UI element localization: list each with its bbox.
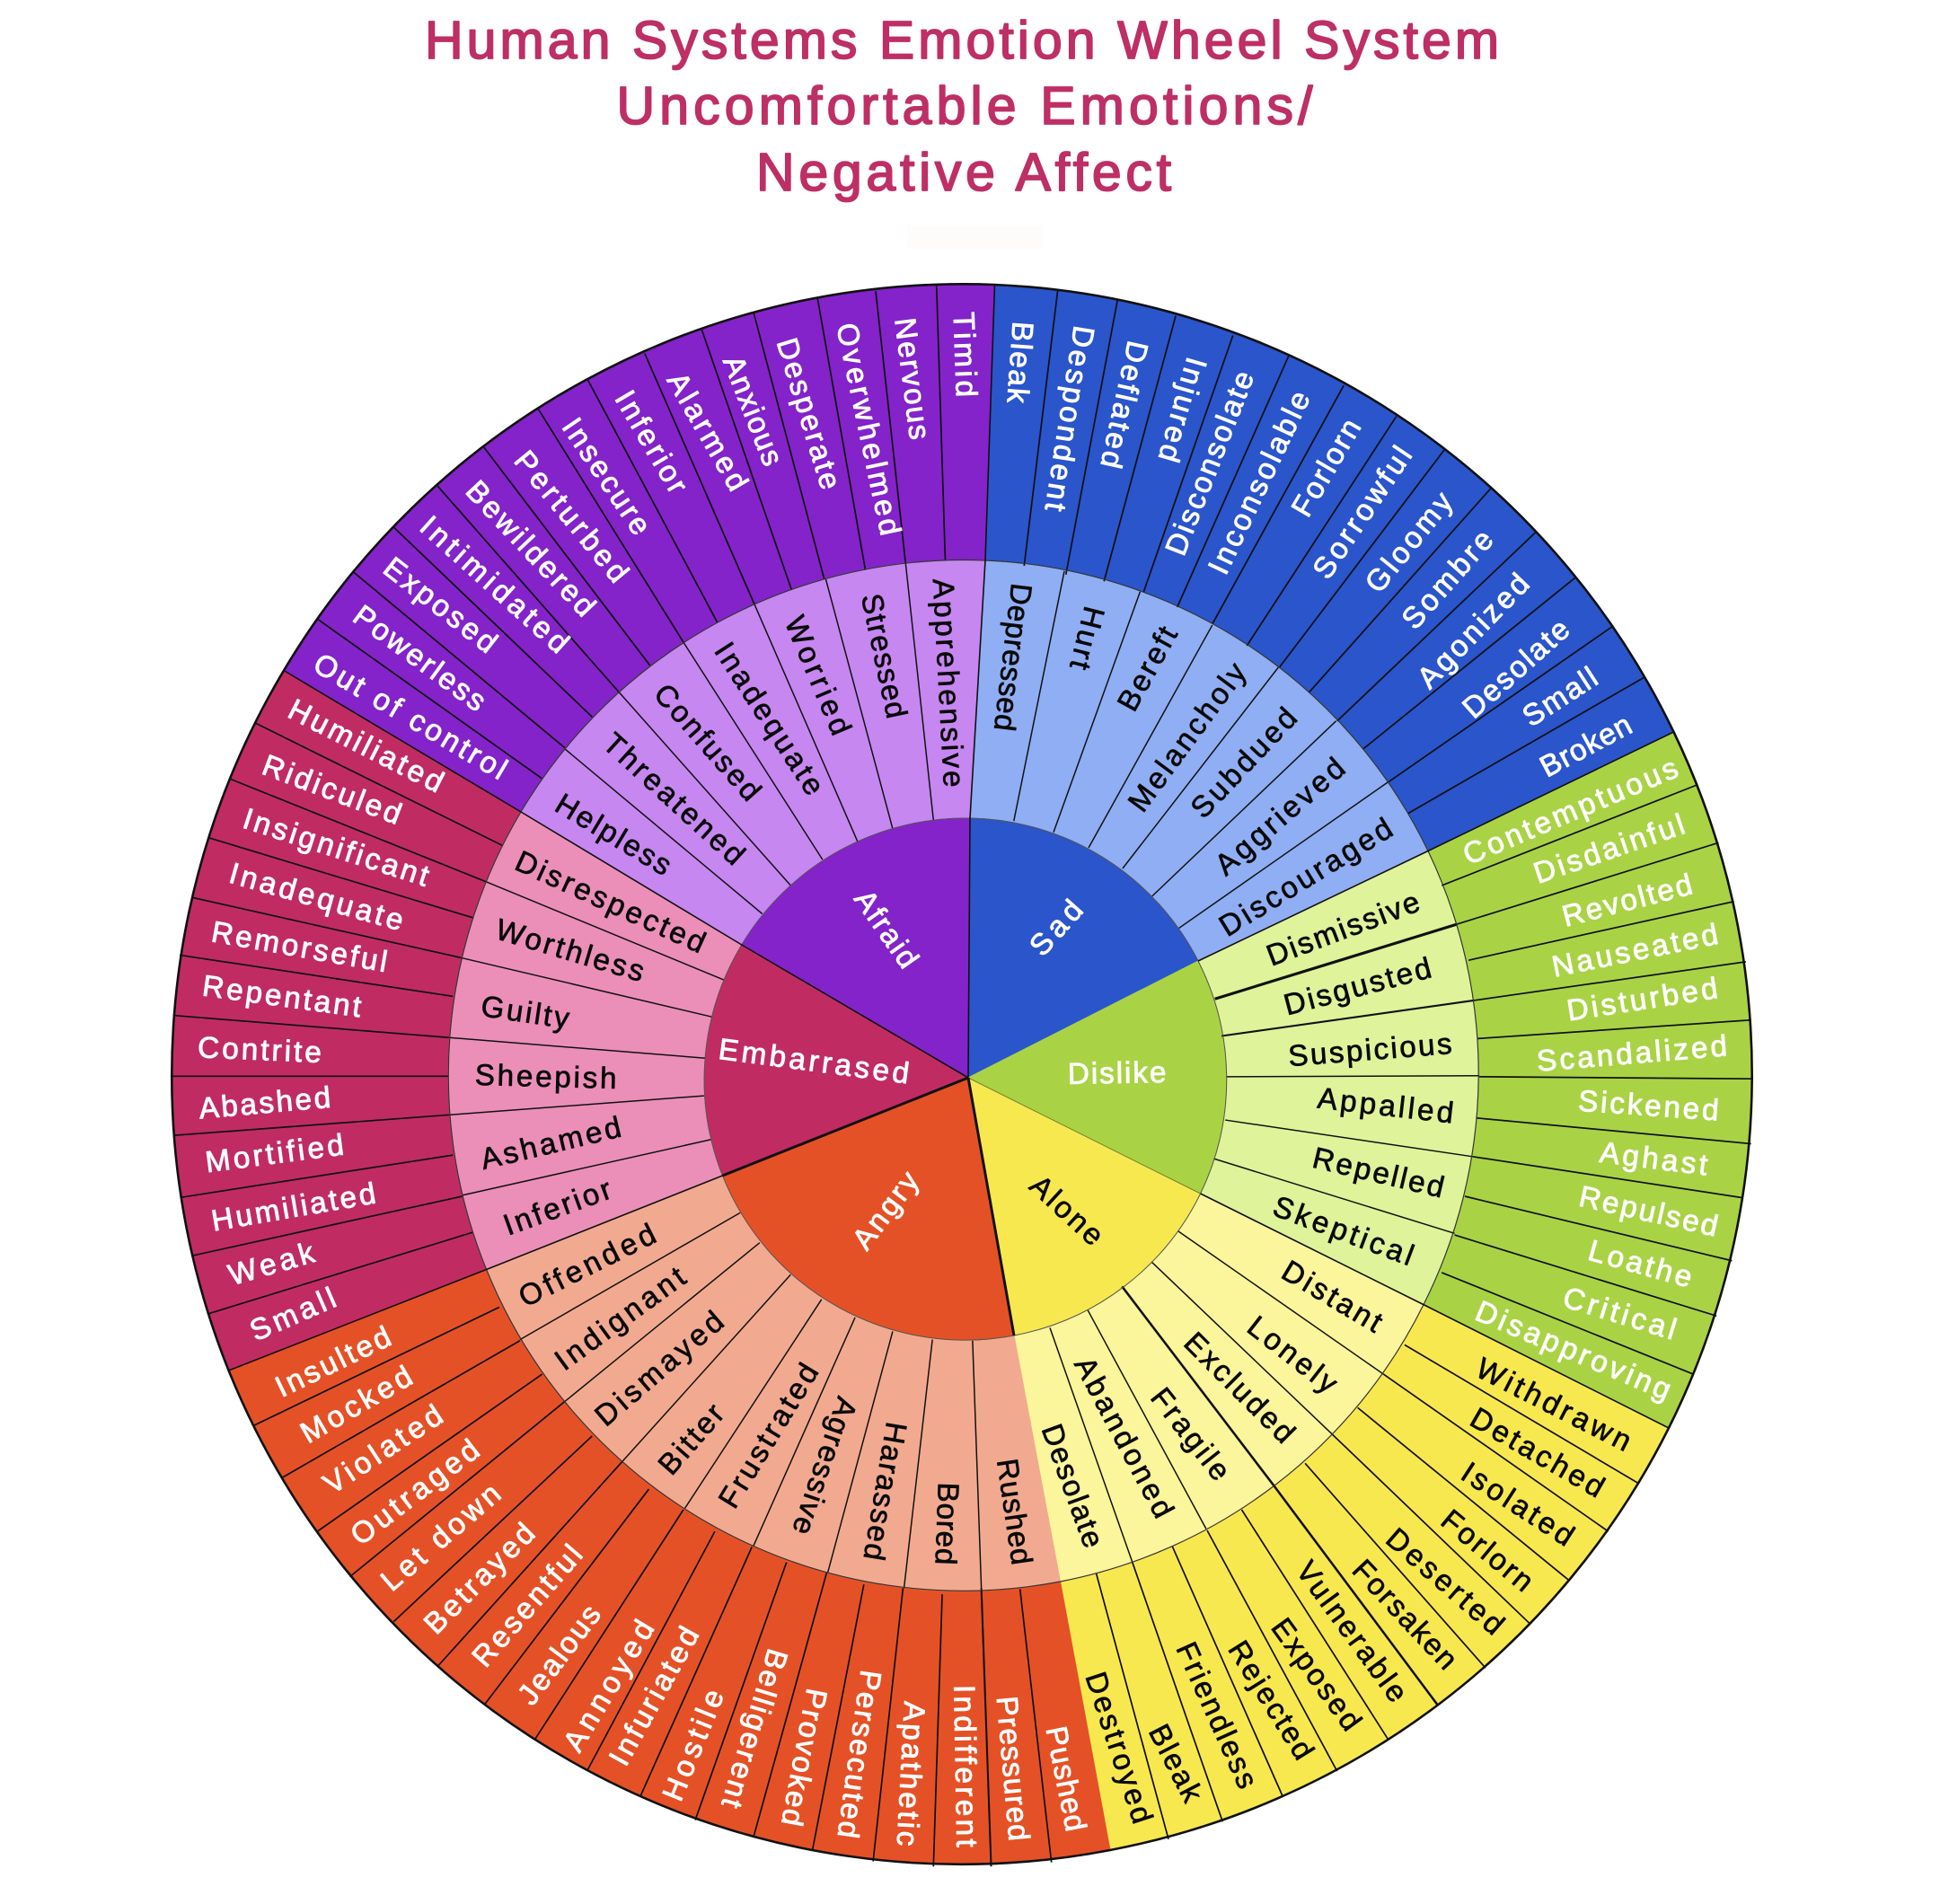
Dislike lower outer ring words: Aghast: [1598, 1136, 1709, 1182]
Sad middle ring words: Aggrieved: [1209, 752, 1352, 882]
Afraid outer ring words: Anxious: [716, 351, 789, 471]
Afraid outer ring words: Exposed: [377, 551, 503, 660]
Sad outer ring words: Desolate: [1457, 613, 1576, 725]
Embarrassed lower outer ring words: [198, 1081, 378, 1348]
panel: Angry sector: [229, 1078, 1110, 1866]
Afraid outer ring words: Desperate: [770, 334, 847, 493]
Embarrassed lower outer ring words: Small: [245, 1282, 341, 1348]
Sad outer ring words: Small: [1517, 661, 1604, 734]
Sad outer ring words: Sombre: [1396, 524, 1500, 636]
Embarrassed lower middle ring words: Inferior: [499, 1173, 616, 1242]
Afraid outer ring words: Nervous: [887, 316, 936, 442]
Embarrassed lower middle ring words: Ashamed: [477, 1111, 624, 1177]
panel: Embarrassed sector: [171, 671, 968, 1371]
Embarrassed upper middle ring words: Sheepish: [474, 1059, 617, 1096]
Dislike upper middle ring words: Suspicious: [1287, 1027, 1453, 1073]
Dislike lower middle ring words: Repelled: [1310, 1142, 1447, 1204]
Dislike lower middle ring words: Appalled: [1316, 1082, 1455, 1131]
Afraid outer ring words: [307, 312, 983, 787]
title: Uncomfortable Emotions/: [616, 76, 1313, 136]
Angry outer ring words: Insulted: [270, 1320, 396, 1405]
Afraid middle ring words: Worried: [778, 612, 858, 740]
Angry outer ring words: Belligerent: [714, 1644, 794, 1811]
Sad middle ring words: Depressed: [987, 581, 1037, 733]
Sad outer ring words: Injured: [1151, 354, 1212, 466]
Embarrassed upper middle ring words: Disrespected: [510, 845, 710, 960]
Dislike upper middle ring words: [1262, 886, 1453, 1073]
Afraid outer ring words: Inferior: [608, 384, 694, 499]
Sad middle ring words: Subdued: [1185, 701, 1304, 825]
Dislike lower middle ring words: Skeptical: [1268, 1190, 1418, 1273]
Sad outer ring words: Inconsolable: [1202, 386, 1318, 579]
ring outlines and sector boundaries: [172, 284, 1752, 1864]
Afraid outer ring words: Overwhelmed: [829, 320, 906, 538]
Sad outer ring words: Broken: [1535, 709, 1637, 784]
Afraid middle ring words: Inadequate: [708, 637, 831, 801]
Afraid outer ring words: Bewildered: [459, 474, 602, 623]
Dislike lower outer ring words: Critical: [1559, 1281, 1680, 1347]
Dislike upper middle ring words: Dismissive: [1262, 886, 1424, 974]
Sad outer ring words: Sorrowful: [1307, 440, 1419, 585]
Afraid middle ring words: Apprehensive: [926, 577, 970, 788]
Angry middle ring words: Dismayed: [589, 1305, 730, 1433]
Alone outer ring words: Withdrawn: [1470, 1352, 1636, 1459]
Alone outer ring words: Destroyed: [1079, 1668, 1159, 1828]
Alone middle ring words: [1035, 1255, 1388, 1552]
Embarrassed upper middle ring words: [474, 845, 710, 1096]
Embarrassed lower middle ring words: [477, 1111, 624, 1242]
Sad middle ring words: Discouraged: [1213, 812, 1398, 944]
Sad middle ring words: [987, 581, 1398, 944]
Alone middle ring words: Fragile: [1143, 1381, 1237, 1487]
Sad outer ring words: [1000, 321, 1637, 784]
Alone outer ring words: Forlorn: [1434, 1503, 1539, 1599]
Angry outer ring words: Hostile: [657, 1685, 731, 1806]
title: Human Systems Emotion Wheel System: [425, 11, 1499, 70]
Embarrassed upper outer ring words: Remorseful: [209, 915, 390, 979]
Angry outer ring words: [270, 1320, 983, 1847]
Sad outer ring words: Despondent: [1038, 323, 1100, 514]
Alone outer ring words: Rejected: [1221, 1635, 1320, 1766]
Sad outer ring words: Deflated: [1093, 338, 1154, 472]
Afraid outer ring words: Insecure: [555, 412, 657, 542]
Angry outer ring words: Let down: [375, 1477, 507, 1598]
title: [425, 11, 1499, 202]
Angry outer ring words: Apathetic: [890, 1700, 930, 1847]
Afraid outer ring words: Timid: [947, 312, 983, 398]
emotion wheel: [171, 284, 1753, 1866]
Alone middle ring words: Distant: [1275, 1255, 1388, 1339]
panel: Alone sector: [968, 1078, 1669, 1850]
Angry outer ring words: Provoked: [774, 1686, 833, 1829]
Afraid outer ring words: Alarmed: [660, 366, 754, 497]
Afraid middle ring words: [550, 577, 970, 883]
Embarrassed upper outer ring words: Humiliated: [283, 693, 449, 799]
Sad centre label: Sad: [1023, 894, 1090, 963]
Angry outer ring words: Violated: [318, 1398, 449, 1501]
Embarrassed upper middle ring words: Guilty: [479, 990, 572, 1036]
Afraid outer ring words: Intimidated: [413, 509, 575, 660]
Alone outer ring words: Bleak: [1142, 1719, 1209, 1808]
Angry middle ring words: Frustrated: [712, 1358, 825, 1514]
Angry outer ring words: Outraged: [345, 1433, 486, 1552]
Dislike upper outer ring words: Revolted: [1559, 868, 1696, 934]
Embarrassed upper outer ring words: [197, 693, 449, 1070]
title: Negative Affect: [756, 143, 1171, 202]
Alone centre label: Alone: [1023, 1168, 1110, 1253]
Alone middle ring words: Abandoned: [1067, 1352, 1180, 1524]
Sad outer ring words: Agonized: [1411, 568, 1537, 695]
Angry outer ring words: Annoyed: [557, 1615, 661, 1758]
Angry outer ring words: Mocked: [295, 1360, 419, 1450]
Angry middle ring words: Harassed: [857, 1420, 913, 1563]
Sad outer ring words: Gloomy: [1359, 486, 1459, 599]
Angry outer ring words: Resentful: [466, 1538, 589, 1674]
Alone outer ring words: Deserted: [1380, 1522, 1511, 1642]
Alone middle ring words: Desolate: [1035, 1420, 1110, 1552]
Embarrassed upper middle ring words: Worthless: [492, 913, 648, 989]
Embarrassed upper outer ring words: Repentant: [200, 970, 363, 1024]
Dislike upper middle ring words: Disgusted: [1281, 952, 1435, 1022]
Afraid outer ring words: Perturbed: [507, 445, 635, 589]
Angry middle ring words: Agressive: [785, 1393, 863, 1539]
Embarrassed lower outer ring words: Humiliated: [209, 1177, 378, 1238]
Afraid outer ring words: Powerless: [347, 599, 492, 718]
Angry lower right outer words: [990, 1695, 1092, 1842]
Angry centre label: Angry: [846, 1165, 926, 1256]
Alone middle ring words: Excluded: [1177, 1326, 1301, 1450]
Angry lower right outer words: Pushed: [1039, 1723, 1092, 1834]
Angry outer ring words: Jealous: [511, 1599, 608, 1712]
Dislike lower outer ring words: Disapproving: [1470, 1295, 1676, 1407]
Angry middle ring words: [514, 1218, 965, 1565]
Afraid middle ring words: Helpless: [550, 788, 677, 883]
Alone outer ring words: Forsaken: [1345, 1554, 1464, 1677]
Embarrassed centre label: Embarrased: [717, 1033, 911, 1091]
Angry lower right middle word: Rushed: [990, 1457, 1038, 1567]
Alone outer ring words: Vulnerable: [1289, 1556, 1414, 1709]
Dislike lower outer ring words: [1470, 1085, 1721, 1407]
Embarrassed lower outer ring words: Abashed: [198, 1081, 332, 1126]
Angry middle ring words: Offended: [514, 1218, 662, 1314]
Dislike upper outer ring words: Nauseated: [1549, 918, 1721, 984]
Afraid middle ring words: Threatened: [596, 727, 751, 872]
Angry middle ring words: Bitter: [652, 1397, 731, 1482]
Afraid middle ring words: Confused: [647, 677, 767, 807]
Embarrassed upper outer ring words: Insignificant: [239, 802, 433, 894]
Sad outer ring words: Disconsolate: [1160, 366, 1261, 560]
Alone outer ring words: Friendless: [1169, 1637, 1264, 1794]
Alone outer ring words: Detached: [1464, 1401, 1609, 1504]
Angry outer ring words: Indifferent: [947, 1685, 983, 1847]
Dislike centre label: Dislike: [1067, 1056, 1167, 1091]
Alone middle ring words: Lonely: [1240, 1309, 1344, 1400]
Alone outer ring words: [1079, 1352, 1636, 1828]
Dislike upper outer ring words: Contemptuous: [1459, 752, 1683, 872]
Alone outer ring words: Isolated: [1455, 1456, 1580, 1553]
Dislike upper outer ring words: [1459, 752, 1728, 1079]
Embarrassed upper outer ring words: Contrite: [197, 1031, 322, 1070]
Sad middle ring words: Hurt: [1063, 603, 1110, 673]
panel: Afraid sector: [284, 284, 995, 1078]
Dislike lower outer ring words: Repulsed: [1576, 1180, 1721, 1244]
Angry middle ring words: Bored: [929, 1482, 965, 1565]
Sad outer ring words: Bleak: [1000, 321, 1039, 404]
Embarrassed upper outer ring words: Ridiculed: [258, 749, 406, 832]
Embarrassed lower outer ring words: Mortified: [203, 1129, 346, 1179]
panel: Dislike sector: [968, 732, 1753, 1428]
Dislike lower outer ring words: Loathe: [1584, 1234, 1696, 1294]
Dislike upper outer ring words: Scandalized: [1536, 1029, 1728, 1079]
Sad middle ring words: Melancholy: [1122, 657, 1254, 818]
Dislike lower middle ring words: [1268, 1082, 1455, 1273]
Dislike upper outer ring words: Disturbed: [1565, 972, 1720, 1028]
Afraid middle ring words: Stressed: [854, 591, 913, 721]
Embarrassed upper outer ring words: Inadequate: [225, 857, 407, 938]
Angry outer ring words: Betrayed: [418, 1517, 542, 1641]
Sad middle ring words: Bereft: [1111, 621, 1185, 717]
Afraid outer ring words: Out of control: [307, 648, 513, 787]
Angry middle ring words: Indignant: [549, 1261, 692, 1378]
Angry outer ring words: Infuriated: [603, 1621, 706, 1771]
Angry outer ring words: Persecuted: [831, 1668, 886, 1840]
Dislike lower outer ring words: Sickened: [1577, 1085, 1720, 1127]
Embarrassed lower outer ring words: Weak: [225, 1236, 319, 1292]
Angry lower right outer words: Pressured: [990, 1695, 1036, 1842]
Alone outer ring words: Exposed: [1265, 1612, 1368, 1737]
Dislike upper outer ring words: Disdainful: [1530, 808, 1689, 891]
Afraid centre label: Afraid: [847, 884, 925, 974]
Sad outer ring words: Forlorn: [1285, 413, 1368, 523]
panel: Sad sector: [968, 285, 1674, 1078]
